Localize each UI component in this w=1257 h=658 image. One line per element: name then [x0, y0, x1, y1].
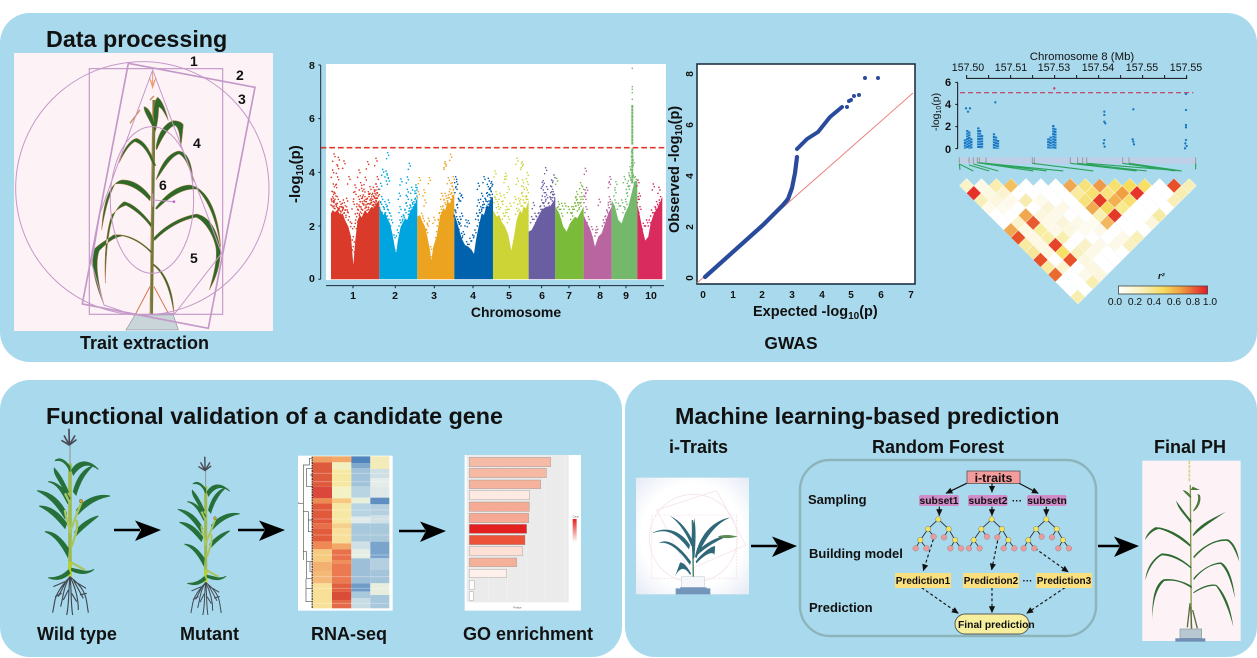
y tick labels: 4	[945, 99, 952, 111]
y axis labels: 4	[309, 167, 315, 179]
arrow: RNA-seq to GO	[399, 522, 446, 542]
labels: trait numbers: 6	[159, 177, 167, 193]
x axis title: 10	[848, 311, 860, 322]
panel: random forest diagram: Building model	[809, 546, 903, 561]
heading: data processing: Data processing	[46, 26, 227, 52]
panel: functional validation	[0, 380, 622, 657]
arrow: mutant to RNA-seq	[238, 520, 285, 541]
legend: r squared: 0.6	[1167, 297, 1181, 308]
arrow: random forest to final PH	[1098, 536, 1139, 557]
position tick labels: 157.50	[952, 62, 984, 74]
y tick labels: 0	[945, 144, 951, 156]
y tick labels: 2	[685, 224, 696, 230]
heading: machine learning: Machine learning-based prediction	[675, 403, 1059, 429]
prediction boxes: Prediction3	[1037, 576, 1092, 587]
y axis labels: 8	[309, 60, 315, 72]
decision tree 3	[1021, 517, 1072, 551]
labels: trait numbers: 4	[193, 135, 201, 151]
position tick labels: 157.51	[995, 62, 1027, 74]
y axis labels: 0	[309, 273, 315, 285]
position tick labels: 157.55	[1126, 62, 1158, 74]
panel: random forest diagram	[800, 460, 1096, 636]
illustration: mutant maize plant	[178, 457, 240, 615]
arrow: i-Traits to random forest	[751, 536, 797, 557]
label: Random Forest: Random Forest	[872, 437, 1004, 457]
position tick labels: 157.53	[1038, 62, 1070, 74]
x axis title: Chromosome	[471, 304, 561, 320]
chart: regional association and LD heatmap	[930, 51, 1217, 308]
x tick labels: 0	[700, 290, 706, 301]
caption: GWAS: GWAS	[764, 333, 818, 353]
i-traits box: i-traits	[975, 471, 1013, 485]
legend: r squared	[1108, 271, 1217, 308]
arrow: wild type to mutant	[114, 520, 161, 541]
chart: QQ plot	[667, 64, 915, 322]
prediction boxes: Prediction1	[896, 576, 951, 587]
labels: trait numbers: 1	[190, 53, 198, 69]
legend: r squared: r²	[1158, 271, 1166, 281]
y axis title: (p)	[667, 106, 683, 124]
y tick labels: 2	[945, 121, 951, 133]
chromosome labels: 10	[645, 290, 657, 302]
subset boxes	[919, 495, 1067, 507]
legend: r squared: 0.8	[1186, 297, 1200, 308]
panel: data processing and GWAS	[0, 13, 1257, 362]
y axis title: (p)	[930, 93, 942, 106]
y tick labels: 6	[945, 77, 951, 89]
label: i-Traits: i-Traits	[669, 437, 728, 457]
chromosome labels: 8	[597, 290, 603, 302]
chart: RNA-seq heatmap	[298, 456, 393, 611]
illustration: wild type maize plant	[37, 429, 110, 615]
x tick labels: 1	[730, 290, 736, 301]
y axis title: 10	[936, 106, 943, 113]
labels: trait numbers: 2	[236, 67, 244, 83]
decision tree 2	[966, 517, 1017, 551]
subset boxes: subset1	[920, 496, 959, 507]
y axis labels	[309, 60, 315, 285]
y axis title: Observed -log	[667, 136, 683, 233]
x tick labels: 2	[759, 290, 765, 301]
y axis title: -log	[930, 113, 942, 131]
arrows and trees	[913, 483, 1072, 613]
chromosome labels: 5	[506, 290, 512, 302]
position tick labels	[952, 62, 1202, 74]
x tick labels: 4	[819, 290, 825, 301]
x tick labels: 5	[848, 290, 854, 301]
x tick labels	[700, 290, 914, 301]
labels: trait numbers: 5	[190, 250, 198, 266]
prediction boxes: Prediction2	[964, 576, 1019, 587]
y axis title: -log	[287, 176, 304, 203]
chart: GO enrichment bars	[465, 455, 581, 611]
legend: r squared: 0.4	[1147, 297, 1161, 308]
heading: functional validation: Functional validation of a candidate gene	[46, 403, 503, 429]
y tick labels	[685, 71, 696, 281]
row labels: Sampling	[808, 492, 867, 507]
label: Final PH: Final PH	[1154, 437, 1226, 457]
chromosome labels	[350, 290, 657, 302]
chromosome labels: 1	[350, 290, 356, 302]
chromosome labels: 4	[470, 290, 476, 302]
y axis labels: 6	[309, 113, 315, 125]
x tick labels: 6	[878, 290, 884, 301]
subset boxes: subset2	[969, 496, 1008, 507]
panel: machine learning prediction	[625, 380, 1257, 657]
image: trait extraction plant with overlays	[14, 53, 273, 331]
captions: functional validation steps: Mutant	[180, 624, 239, 644]
position tick labels: 157.54	[1082, 62, 1114, 74]
x axis title: Expected -log	[753, 304, 848, 320]
captions: functional validation steps	[37, 624, 593, 644]
subset boxes: subsetn	[1027, 496, 1067, 507]
labels: trait numbers: 3	[238, 91, 246, 107]
captions: functional validation steps: Wild type	[37, 624, 117, 644]
y tick labels: 8	[685, 71, 696, 77]
chart: Manhattan plot	[287, 60, 666, 320]
chart: GO enrichment bars: Count	[573, 515, 579, 518]
chromosome labels: 7	[566, 290, 572, 302]
y axis title: 10	[674, 124, 685, 136]
chromosome labels: 3	[431, 290, 437, 302]
chromosome labels: 2	[392, 290, 398, 302]
x tick labels: 7	[908, 290, 914, 301]
labels: trait numbers	[159, 53, 246, 266]
position tick labels: 157.55	[1170, 62, 1202, 74]
y axis title: 10	[295, 164, 306, 176]
legend: r squared: 0.0	[1108, 297, 1122, 308]
panel: random forest diagram: Prediction	[809, 600, 873, 615]
subset boxes: ···	[1012, 496, 1022, 507]
y tick labels	[945, 77, 952, 156]
legend: r squared: 0.2	[1128, 297, 1142, 308]
x tick labels: 3	[789, 290, 795, 301]
final prediction pill: Final prediction	[958, 620, 1035, 631]
y tick labels: 4	[685, 173, 696, 179]
prediction boxes: ···	[1022, 576, 1032, 587]
image: final plant height	[1142, 461, 1241, 642]
chromosome labels: 6	[539, 290, 545, 302]
axis title: Chromosome 8 (Mb)	[1030, 51, 1134, 63]
caption: trait extraction: Trait extraction	[80, 333, 209, 353]
captions: functional validation steps: GO enrichment	[463, 624, 593, 644]
x axis title: (p)	[859, 304, 878, 320]
y axis labels: 2	[309, 221, 315, 233]
y tick labels: 0	[685, 275, 696, 281]
chart: GO enrichment bars: Pvalue	[513, 606, 522, 610]
final prediction pill	[955, 614, 1035, 634]
y tick labels: 6	[685, 122, 696, 128]
image: i-Traits plant	[636, 478, 749, 594]
chromosome labels: 9	[623, 290, 629, 302]
legend: r squared: 1.0	[1203, 297, 1217, 308]
prediction boxes	[895, 573, 1092, 588]
LD triangle heatmap	[959, 67, 1197, 304]
y axis title: (p)	[287, 145, 304, 164]
decision tree 1	[913, 517, 964, 551]
captions: functional validation steps: RNA-seq	[311, 624, 387, 644]
